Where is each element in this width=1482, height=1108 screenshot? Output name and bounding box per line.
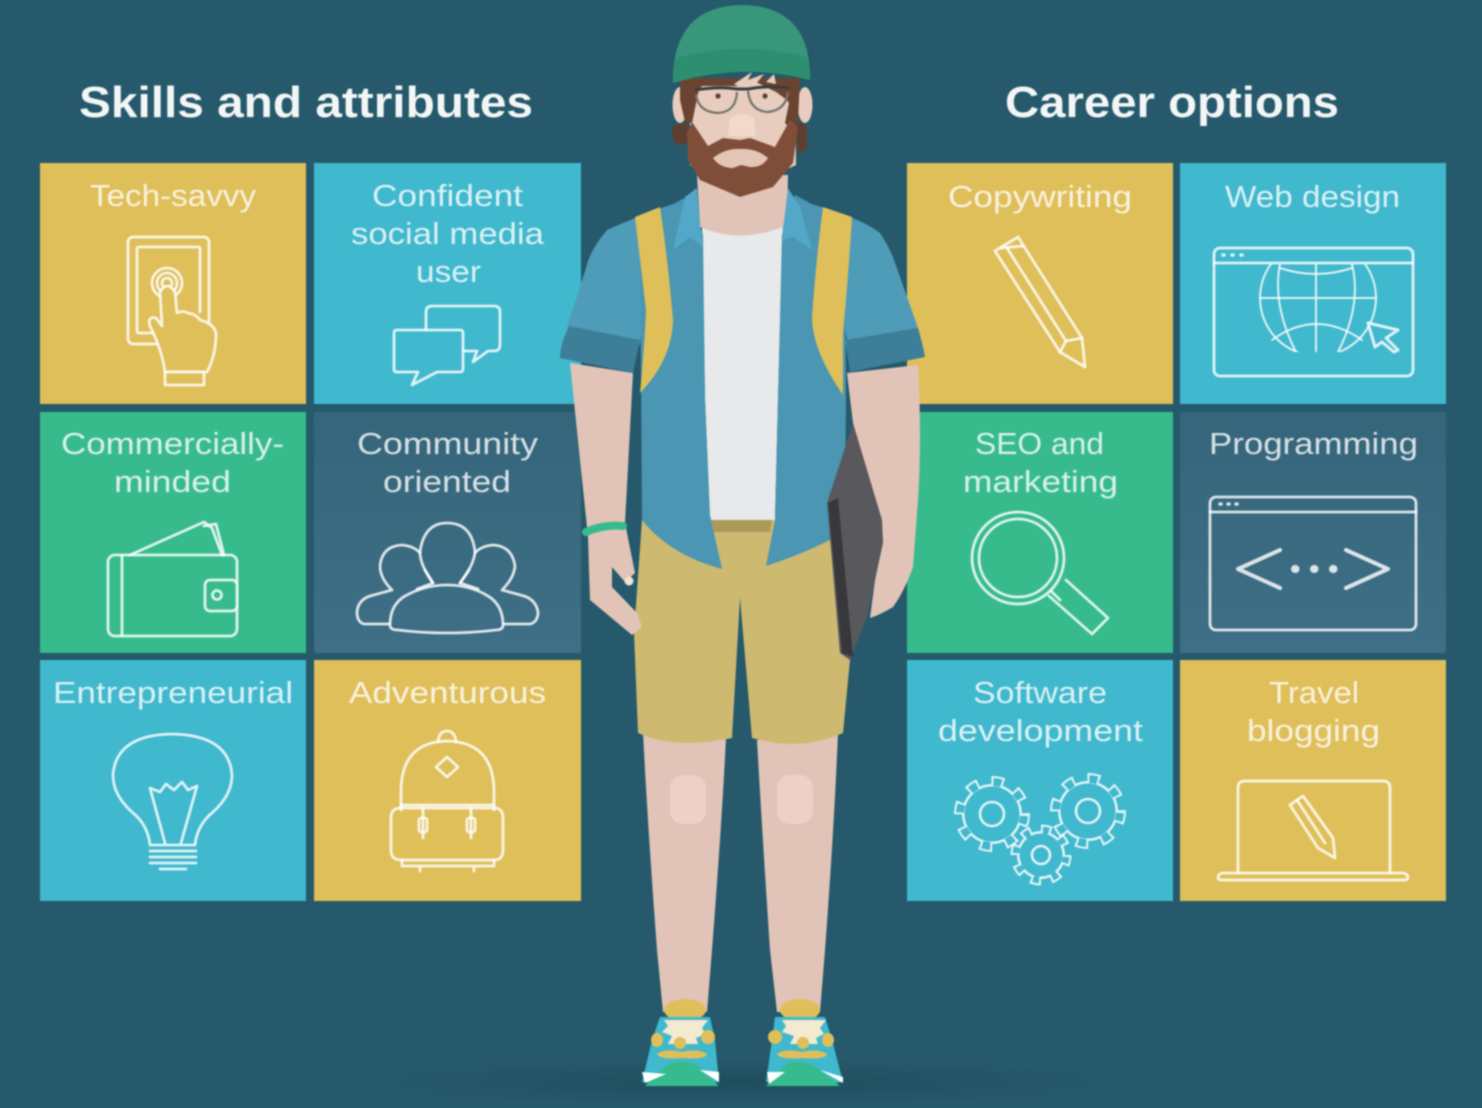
panel: programming: Programming [1209, 426, 1418, 461]
label: commercially-minded [61, 426, 284, 499]
panel: programming [1180, 412, 1446, 653]
ears [672, 87, 688, 123]
label: travel blogging: blogging [1247, 713, 1380, 748]
back hair [672, 122, 807, 153]
panel: copywriting: Copywriting [948, 179, 1132, 214]
glasses top bar [695, 87, 790, 90]
panel: entrepreneurial: Entrepreneurial [53, 675, 293, 710]
beanie [673, 5, 810, 83]
label: SEO and marketing [963, 426, 1118, 499]
panel: entrepreneurial [40, 660, 306, 901]
illustration: young man with beanie and backpack [560, 5, 925, 1086]
face [690, 80, 796, 190]
nose highlight [728, 114, 756, 136]
panel: adventurous [314, 660, 581, 901]
mouth area [713, 149, 768, 168]
panel: confident social media user [314, 163, 581, 404]
icon: magnifying glass [972, 512, 1108, 634]
right arm [847, 365, 920, 618]
fringe highlight [734, 72, 776, 88]
label: software development: Software [973, 675, 1107, 710]
left arm and hand [570, 363, 642, 635]
panel: travel blogging [1180, 660, 1446, 901]
icon: light bulb [113, 734, 232, 869]
label: confident social media user: user [416, 254, 481, 289]
icon: pencil [995, 237, 1085, 367]
folder [827, 423, 883, 660]
collar [673, 188, 812, 250]
globe [1258, 263, 1378, 353]
label: confident social media user [351, 178, 545, 289]
icon: group of people [357, 523, 538, 633]
label: community oriented [357, 426, 539, 499]
panel: community oriented [314, 412, 581, 653]
icon: code window [1210, 497, 1416, 630]
label: community oriented: Community [357, 426, 539, 461]
left shoe [642, 999, 719, 1086]
icon: chat bubbles [394, 306, 500, 385]
icon: backpack [391, 731, 503, 871]
label: software development: development [938, 713, 1143, 748]
panel: commercially-minded [40, 412, 306, 653]
icon: browser with globe [1214, 240, 1413, 376]
shirt sleeves [560, 200, 925, 373]
shorts [634, 518, 850, 744]
glasses [696, 91, 788, 113]
waistband [711, 519, 772, 532]
legs [643, 733, 838, 1012]
label: confident social media user: social media [351, 216, 545, 251]
t-shirt [702, 225, 783, 520]
label: SEO and marketing: SEO and [975, 426, 1104, 461]
icon: wallet [108, 522, 237, 636]
label: software development [938, 675, 1143, 748]
icon: laptop with pencil [1218, 781, 1408, 880]
heading: career options: Career options [1005, 78, 1339, 127]
panel: adventurous: Adventurous [349, 675, 546, 710]
icon: gears [960, 779, 1120, 880]
panel: copywriting [907, 163, 1173, 404]
head [672, 72, 812, 197]
panel: tech-savvy: Tech-savvy [90, 178, 257, 213]
icon: hand on tablet [128, 237, 216, 385]
neck [697, 175, 788, 236]
panel: tech-savvy [40, 163, 306, 404]
label: commercially-minded: minded [114, 464, 231, 499]
label: travel blogging [1247, 675, 1380, 748]
right shoe [766, 999, 843, 1086]
panel: software development [907, 660, 1173, 901]
backpack straps [635, 207, 852, 395]
bracelet [586, 526, 623, 532]
hair [680, 78, 800, 130]
label: SEO and marketing: marketing [963, 464, 1118, 499]
label: community oriented: oriented [383, 464, 511, 499]
shirt body [640, 195, 846, 569]
label: travel blogging: Travel [1269, 675, 1359, 710]
label: confident social media user: Confident [372, 178, 523, 213]
panel: SEO and marketing [907, 412, 1173, 653]
label: commercially-minded: Commercially- [61, 426, 284, 461]
heading: skills and attributes: Skills and attributes [79, 78, 533, 127]
fringe [694, 80, 787, 100]
panel: web design: Web design [1225, 179, 1400, 214]
beard [687, 120, 798, 197]
panel: web design [1180, 163, 1446, 404]
